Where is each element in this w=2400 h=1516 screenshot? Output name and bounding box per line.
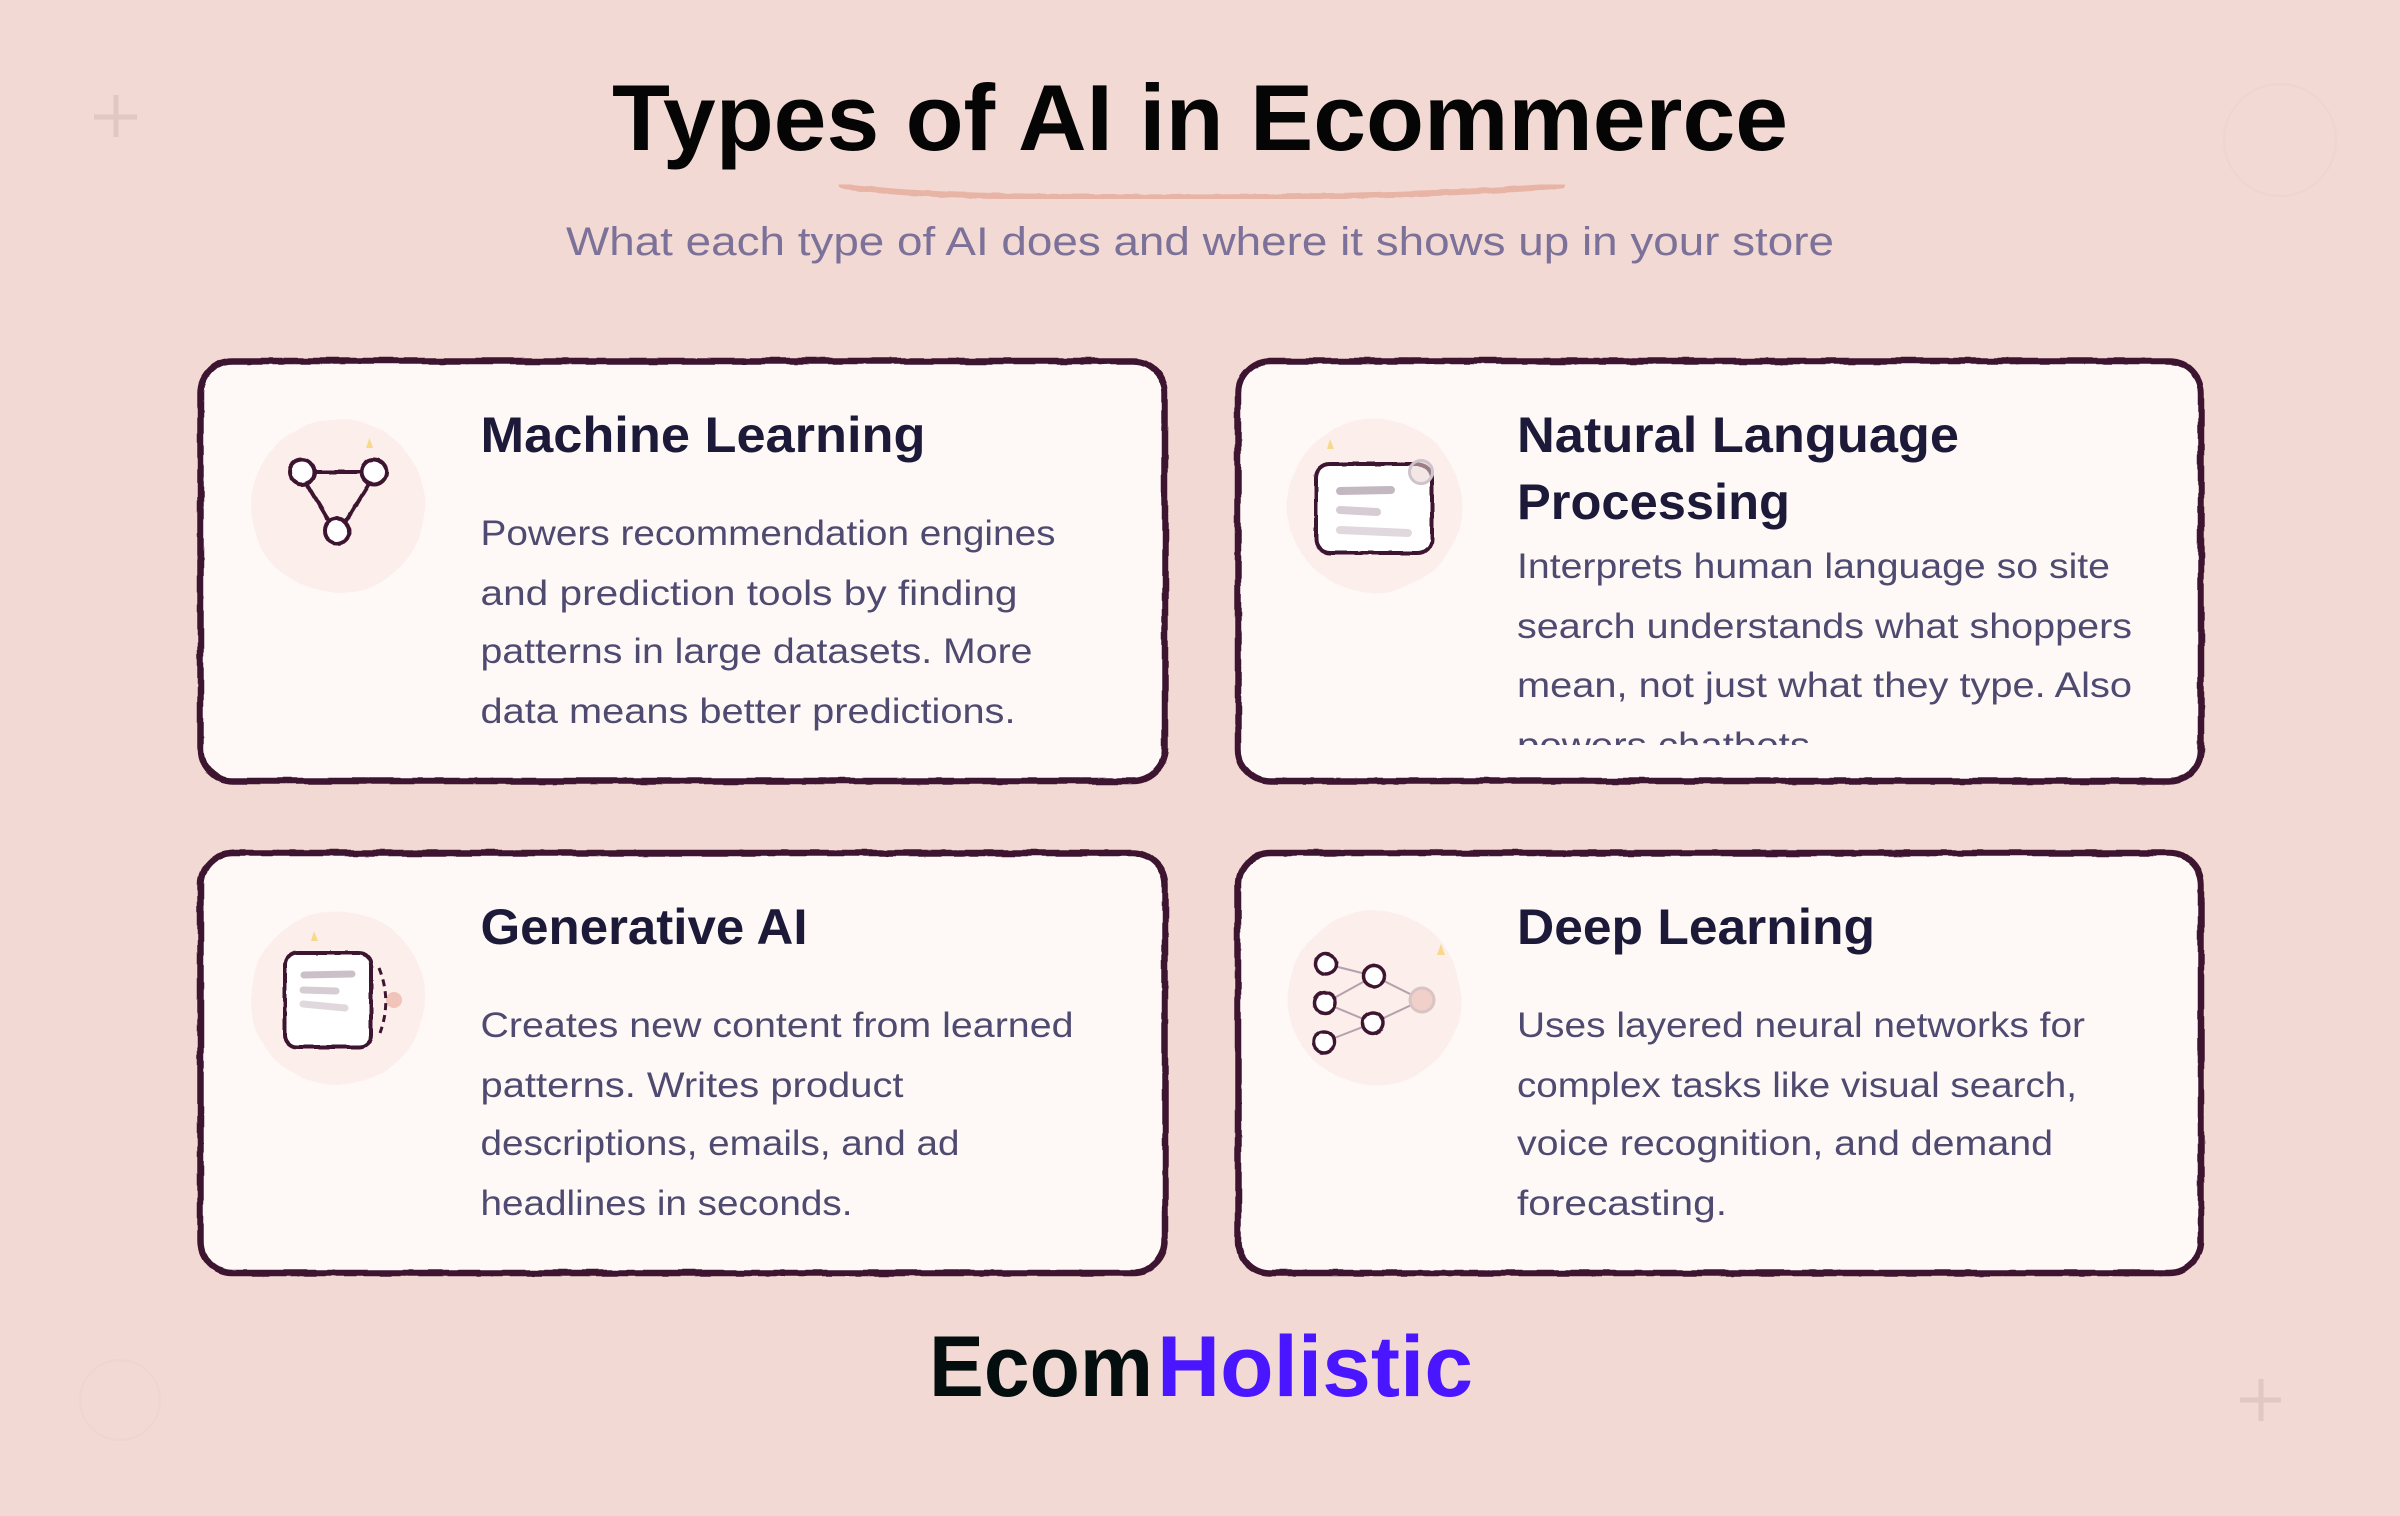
subtitle: What each type of AI does and where it shows up in your store	[566, 220, 1834, 264]
description: Interprets human language so site	[1517, 547, 2110, 586]
description: Powers recommendation engines	[480, 514, 1056, 553]
icon: neural network	[1288, 911, 1462, 1085]
description: powers chatbots	[1517, 726, 1810, 765]
heading: Machine Learning	[480, 407, 926, 463]
icon: document with text lines	[1288, 419, 1462, 593]
description: headlines in seconds.	[480, 1184, 852, 1223]
icon: document generating content	[251, 911, 425, 1085]
card frame	[1238, 853, 2201, 1273]
description: mean, not just what they type. Also	[1517, 666, 2132, 705]
icon: network triangle	[251, 419, 425, 593]
card frame	[200, 853, 1165, 1273]
brand logo: Holistic	[1157, 1319, 1473, 1415]
heading: Deep Learning	[1517, 899, 1875, 955]
heading: Generative AI	[480, 899, 808, 955]
description: Uses layered neural networks for	[1517, 1006, 2085, 1045]
description	[1518, 552, 2131, 745]
description: search understands what shoppers	[1517, 607, 2132, 646]
decoration: plus bottom right	[2240, 1379, 2281, 1421]
heading: Processing	[1517, 474, 1790, 530]
panel: machine learning	[200, 361, 1165, 781]
heading	[1517, 407, 1959, 530]
decoration: circle bottom left	[80, 1360, 160, 1440]
brand logo: Ecom	[929, 1319, 1153, 1415]
decoration: plus top left	[94, 95, 137, 137]
description: data means better predictions.	[480, 692, 1016, 731]
panel: generative ai	[200, 853, 1165, 1273]
panel: deep learning	[1238, 853, 2201, 1273]
card frame	[1238, 361, 2201, 781]
description: patterns. Writes product	[480, 1066, 904, 1105]
title: Types of AI in Ecommerce	[612, 65, 1788, 170]
description: patterns in large datasets. More	[480, 632, 1032, 671]
description: voice recognition, and demand	[1517, 1124, 2053, 1163]
description	[1517, 1006, 2085, 1223]
description: and prediction tools by finding	[480, 574, 1018, 613]
description: forecasting.	[1517, 1184, 1727, 1223]
description: complex tasks like visual search,	[1517, 1066, 2077, 1105]
description: Creates new content from learned	[480, 1006, 1074, 1045]
description: descriptions, emails, and ad	[480, 1124, 960, 1163]
brand logo	[929, 1319, 1473, 1415]
heading: Natural Language	[1517, 407, 1959, 463]
card frame	[200, 361, 1165, 781]
title underline	[841, 186, 1562, 197]
panel: natural language processing	[1238, 361, 2201, 781]
decoration: circle top right	[2224, 84, 2336, 196]
description	[480, 514, 1056, 731]
description	[480, 1006, 1074, 1223]
